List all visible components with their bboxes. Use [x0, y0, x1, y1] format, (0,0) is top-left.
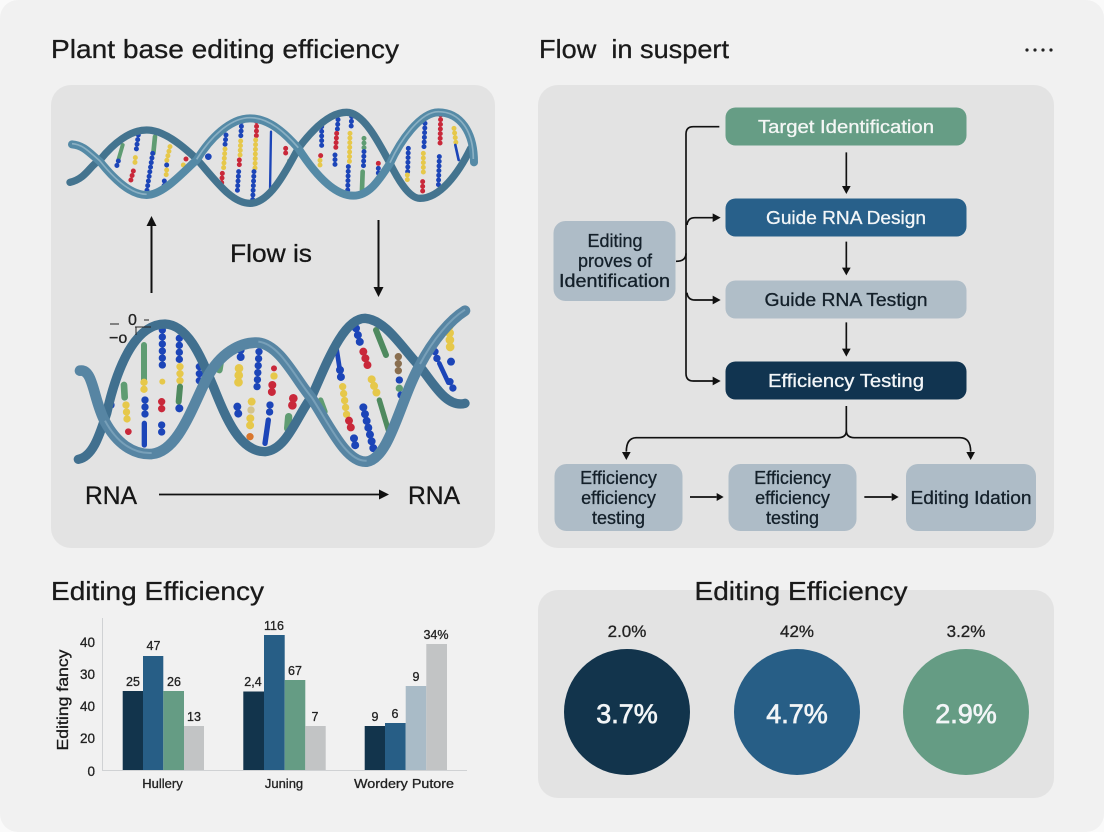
label: flow is: Flow is: [230, 240, 312, 268]
node: editing proves of identification: Editing: [587, 231, 643, 251]
stat: 4.7%: 42%: [780, 622, 814, 641]
stat: 3.7%: 3.7%: [596, 699, 658, 729]
node: guide rna design: Guide RNA Design: [766, 208, 926, 228]
node: efficiency testing lower 1: testing: [592, 508, 645, 528]
panel: dna flow: [51, 85, 495, 548]
bars: juning: [243, 635, 326, 770]
node: editing proves of identification: Identification: [559, 271, 670, 291]
bar value labels: 25: [126, 675, 140, 689]
bar value labels: 116: [264, 619, 284, 633]
label: rna right: RNA: [408, 482, 460, 510]
icon: molecule glyphs: 0: [128, 312, 137, 329]
arrow: rna to rna: [159, 494, 387, 496]
stat: 4.7%: 4.7%: [766, 699, 828, 729]
stat: 4.7%: [734, 622, 860, 775]
node: efficiency testing lower 1: [554, 464, 682, 531]
x axis labels: Hullery: [142, 776, 183, 791]
bar value labels: 67: [288, 664, 302, 678]
y axis ticks: 0: [87, 764, 95, 779]
node: efficiency testing: Efficiency Testing: [768, 371, 924, 391]
node: editing proves of identification: [554, 221, 676, 301]
x axis labels: Juning: [265, 776, 303, 791]
illustration: upper dna helix: [70, 112, 474, 203]
node: editing proves of identification: proves of: [578, 251, 653, 271]
bar value labels: 6: [392, 707, 399, 721]
bar value labels: 9: [372, 710, 379, 724]
node: target identification: Target Identification: [758, 117, 934, 137]
bars: hullery: [123, 656, 204, 770]
panel: editing efficiency donuts: [538, 576, 1054, 798]
node: efficiency testing lower 2: Efficiency: [754, 468, 831, 488]
stat: 2.9%: [903, 622, 1029, 775]
node: efficiency testing lower 1: Efficiency: [580, 468, 657, 488]
bar value labels: 47: [147, 639, 160, 653]
node: guide rna testign: [726, 280, 966, 318]
stat: 3.7%: [564, 622, 690, 775]
heading: editing efficiency chart: Editing Efficiency: [51, 576, 264, 606]
node: editing idation: Editing Idation: [910, 488, 1032, 508]
bar value labels: 26: [167, 675, 181, 689]
label: rna left: RNA: [85, 482, 137, 510]
node: efficiency testing lower 2: [728, 464, 856, 531]
y axis ticks: 40: [80, 635, 95, 650]
connectors: flowchart arrows: [622, 127, 975, 501]
node: editing idation: [906, 464, 1036, 531]
y axis ticks: 30: [80, 667, 95, 682]
stat: 2.9%: 3.2%: [947, 622, 985, 641]
node: efficiency testing lower 1: efficiency: [581, 488, 656, 508]
bars: wordery putore: [365, 644, 447, 770]
bar value labels: 34%: [423, 628, 449, 642]
illustration: lower dna helix: [78, 310, 465, 462]
title: plant base editing efficiency: Plant base editing efficiency: [51, 34, 399, 64]
icon: molecule glyphs: [109, 312, 151, 347]
node: efficiency testing lower 2: testing: [766, 508, 819, 528]
node: efficiency testing lower 2: efficiency: [755, 488, 830, 508]
bar value labels: [126, 619, 449, 724]
x axis labels: [142, 776, 454, 791]
bar value labels: 2,4: [244, 675, 262, 689]
bar chart: [55, 618, 467, 791]
y axis ticks: 20: [80, 731, 95, 746]
stat: 2.9%: 2.9%: [935, 699, 997, 729]
x axis labels: Wordery Putore: [354, 776, 454, 791]
bar value labels: 13: [187, 710, 201, 724]
y axis label: Editing fancy: [55, 650, 72, 750]
bar value labels: 7: [312, 710, 319, 724]
icon: molecule glyphs: −o: [109, 330, 127, 347]
bar value labels: 9: [413, 670, 420, 684]
node: efficiency testing: [726, 362, 966, 400]
heading: Editing Efficiency: [694, 576, 908, 606]
y axis ticks: [80, 635, 95, 779]
stat: 3.7%: 2.0%: [608, 622, 646, 641]
arrow: up: [150, 218, 152, 293]
title: flow in suspert: Flow in suspert: [539, 34, 730, 64]
node: guide rna testign: Guide RNA Testign: [764, 290, 928, 310]
icon: more menu dots: [1025, 48, 1053, 52]
arrow: down: [378, 220, 380, 295]
node: target identification: [726, 108, 966, 146]
node: guide rna design: [726, 198, 966, 236]
y axis ticks: 40: [80, 699, 95, 714]
panel: flowchart: [538, 85, 1054, 548]
